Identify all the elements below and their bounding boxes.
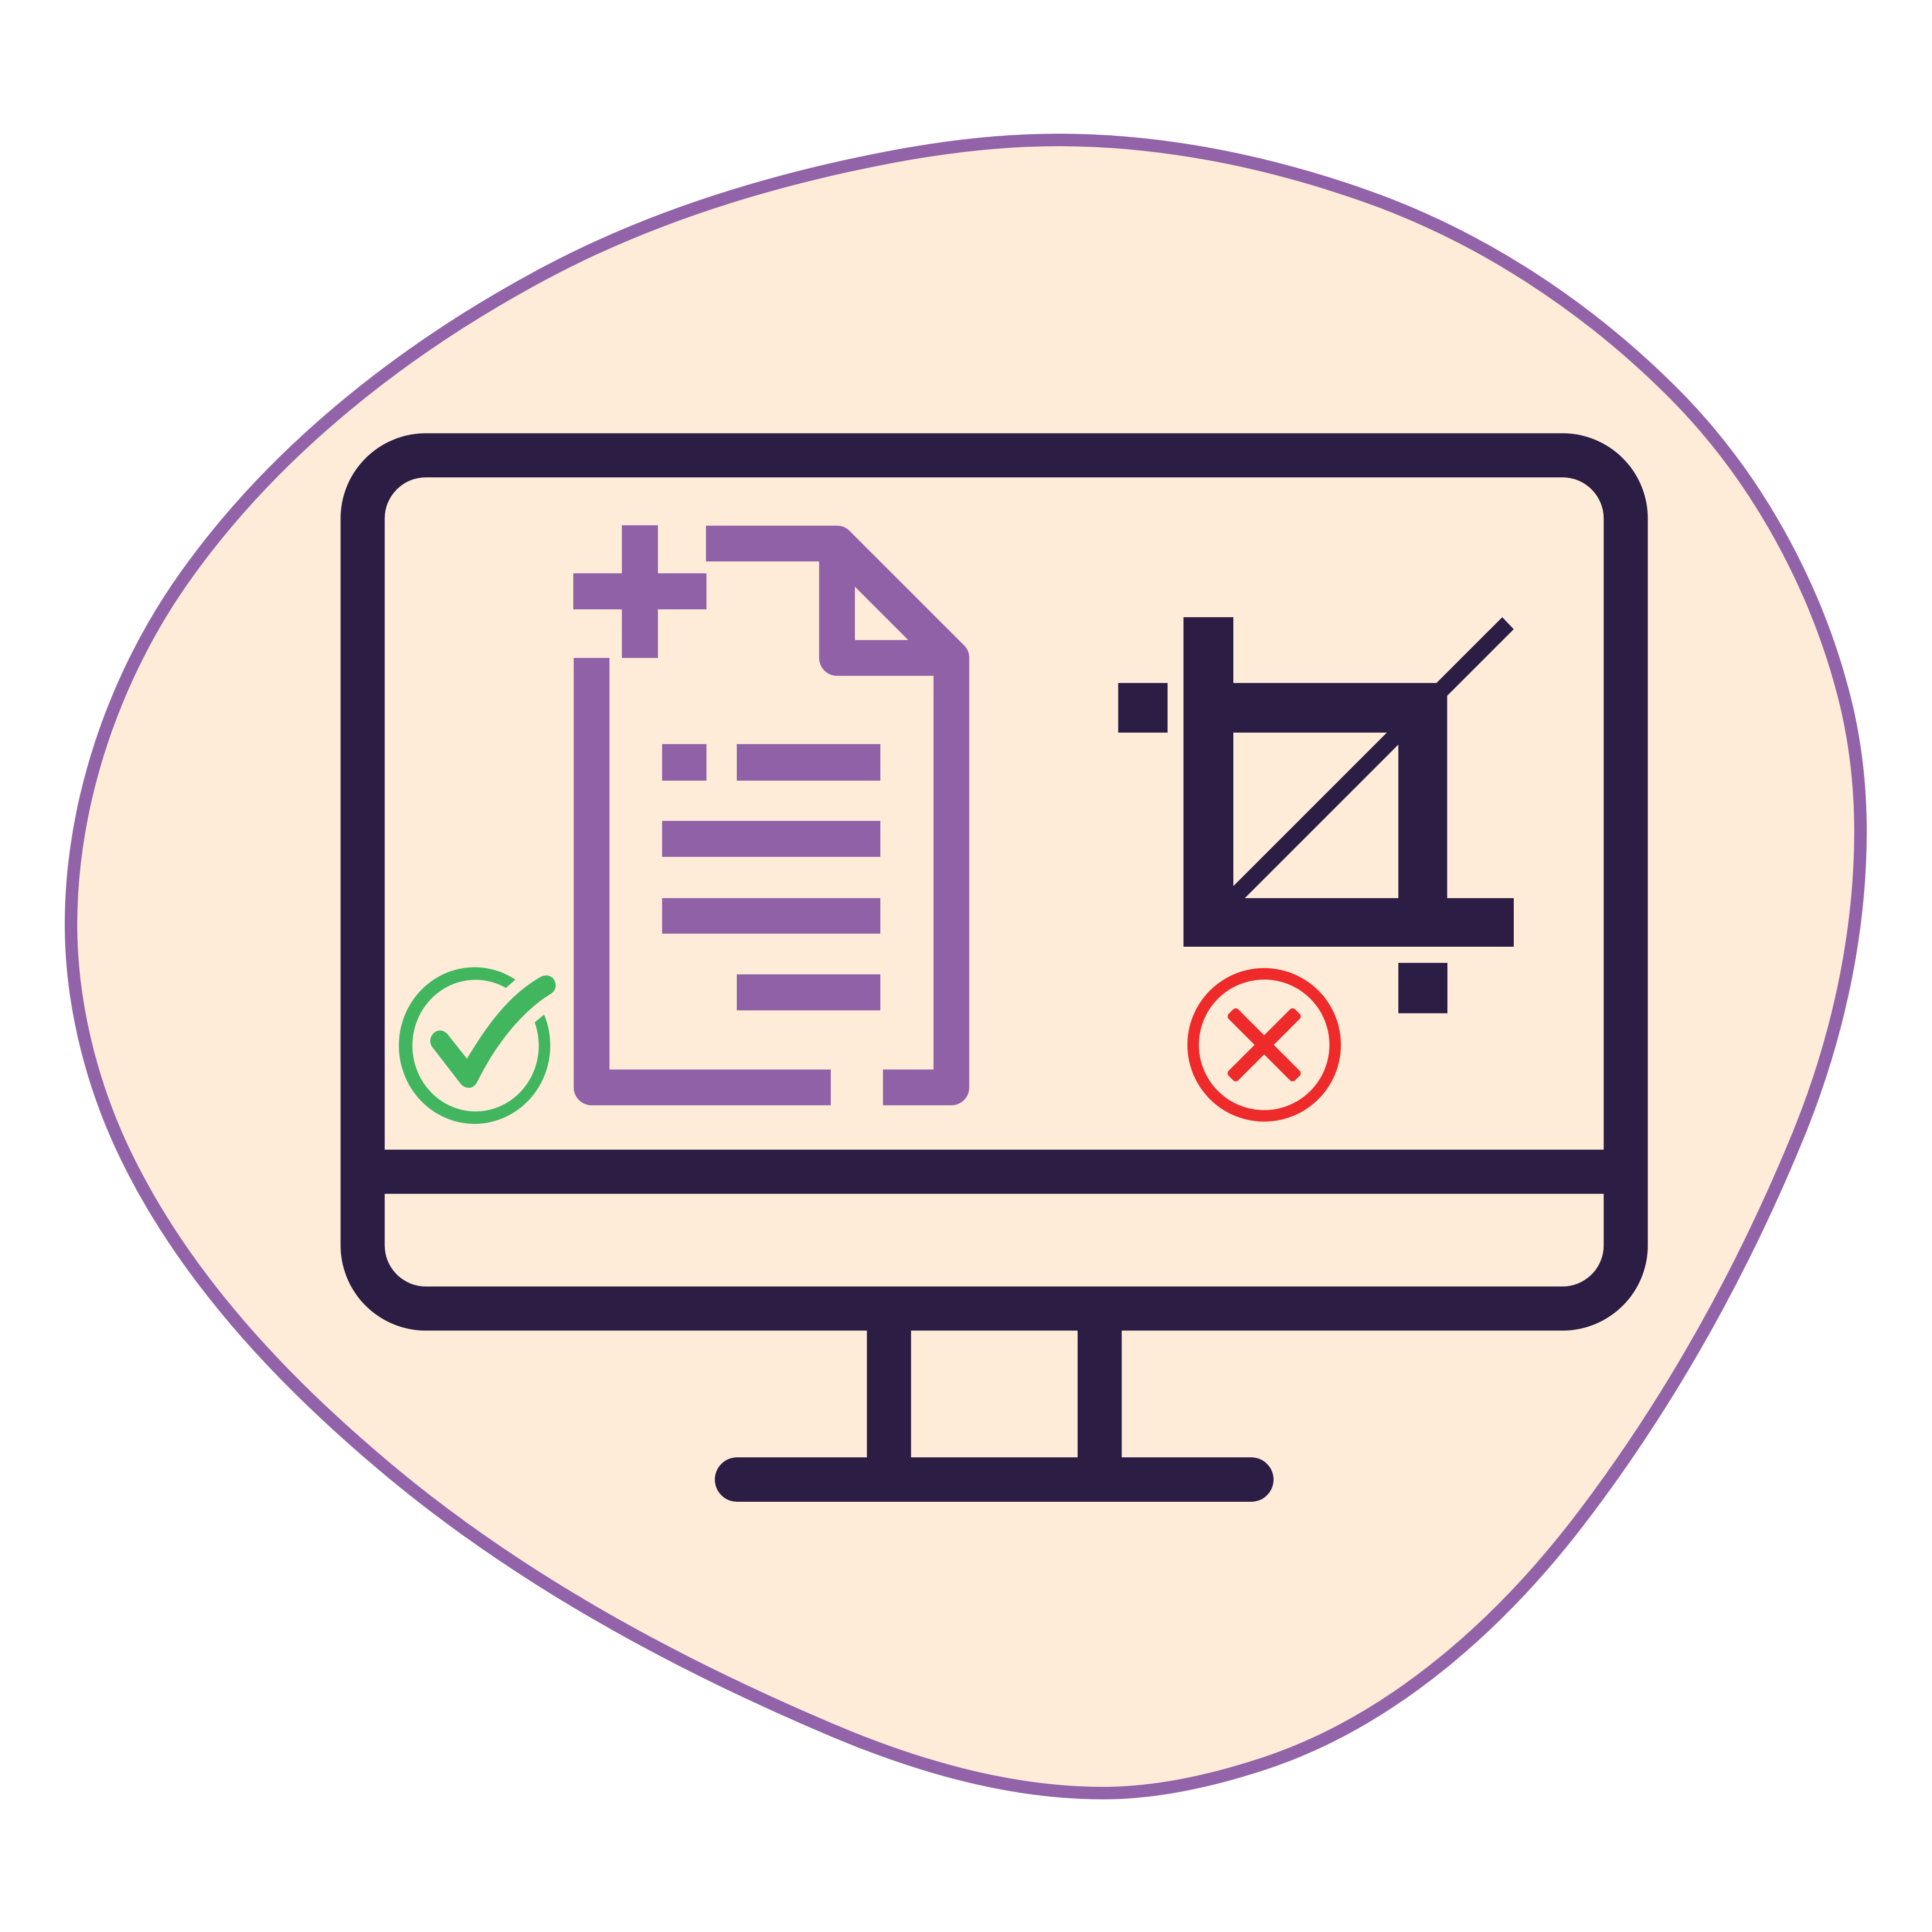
icon: red cross: [1193, 974, 1335, 1116]
monitor base: [715, 1457, 1274, 1502]
monitor chin divider: [362, 1150, 1625, 1194]
monitor frame: [362, 455, 1626, 1309]
small square bottom: [1398, 963, 1447, 1013]
icon: crop tool: [1118, 617, 1514, 1013]
cross mark: [1198, 979, 1330, 1111]
check stroke: [430, 975, 556, 1088]
cross ring: [1193, 974, 1335, 1116]
icon: new document: [573, 525, 951, 1087]
document text lines: [662, 744, 880, 1010]
icon: green check mark: [399, 967, 556, 1124]
icon: plus sign: [573, 525, 706, 658]
check ring: [399, 967, 550, 1124]
small square left: [1118, 683, 1168, 733]
background blob: [71, 140, 1860, 1793]
document outline: [592, 544, 951, 1087]
monitor stand: [889, 1309, 1100, 1480]
crop diagonal: [1233, 617, 1514, 899]
computer monitor: [362, 455, 1626, 1502]
crop frame: [1183, 617, 1514, 947]
